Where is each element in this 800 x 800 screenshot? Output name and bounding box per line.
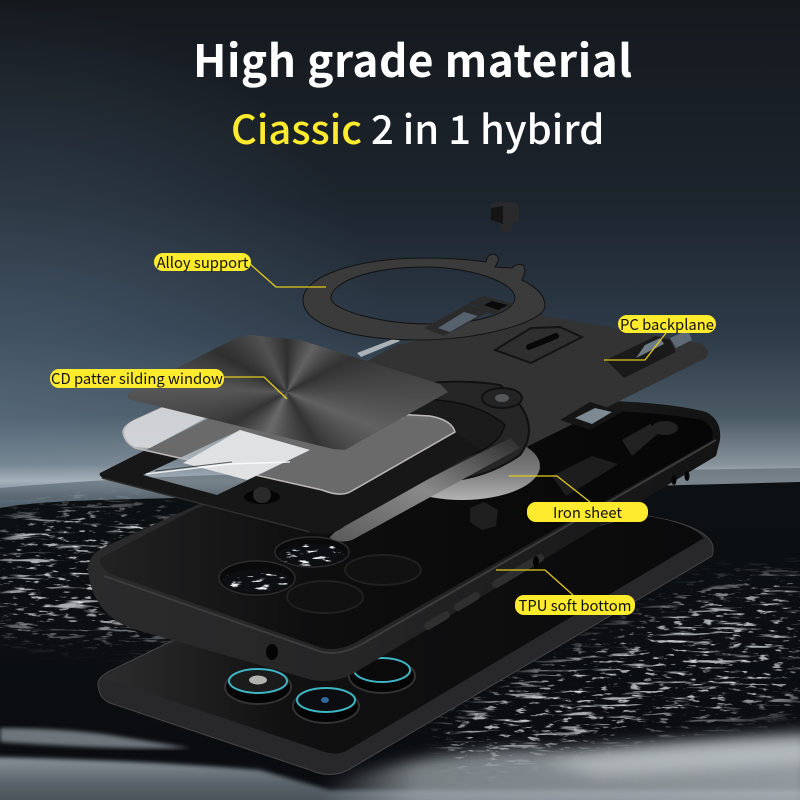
side buttons: [428, 558, 540, 626]
title: High grade material: [193, 26, 633, 90]
alloy ring support: [303, 254, 545, 340]
PC backplane: [300, 315, 708, 530]
leader: alloy support: [250, 264, 326, 287]
camera lens 1: [225, 669, 291, 704]
exploded phone case illustration: [88, 202, 720, 775]
empty camera holes: [210, 530, 421, 613]
leader: CD window: [224, 377, 287, 399]
CD pattern sliding window: [128, 335, 448, 450]
shiny side strip of front frame: [330, 438, 520, 542]
frame knob: [244, 487, 280, 504]
camera lens 2: [293, 688, 359, 723]
label: Iron sheet: [527, 502, 648, 522]
label: Iron sheet: Iron sheet: [553, 502, 622, 522]
case interior parts: [470, 421, 690, 530]
label: Alloy support: Alloy support: [157, 252, 248, 272]
subtitle: Ciassic 2 in 1 hybird: [231, 98, 604, 156]
leader: TPU soft bottom: [496, 570, 573, 595]
frame lower rim: [102, 478, 310, 532]
case side highlight: [104, 440, 716, 653]
backplane windows: [606, 336, 676, 378]
front sliding frame: [100, 415, 480, 534]
camera lens 3: [349, 658, 415, 693]
TPU soft case: [88, 400, 720, 681]
port holes: [266, 644, 278, 660]
label: TPU soft bottom: TPU soft bottom: [519, 594, 631, 616]
iron sheet disc: [384, 432, 540, 500]
clear glass window: [123, 402, 455, 494]
screw knob: [491, 202, 519, 232]
label: PC backplane: PC backplane: [620, 314, 714, 334]
leader: PC backplane: [604, 333, 666, 360]
leader: iron sheet: [509, 476, 590, 502]
backplane center ring recess: [365, 382, 529, 481]
phone body: [98, 515, 713, 774]
label: CD patter silding window: CD patter silding window: [51, 368, 223, 389]
